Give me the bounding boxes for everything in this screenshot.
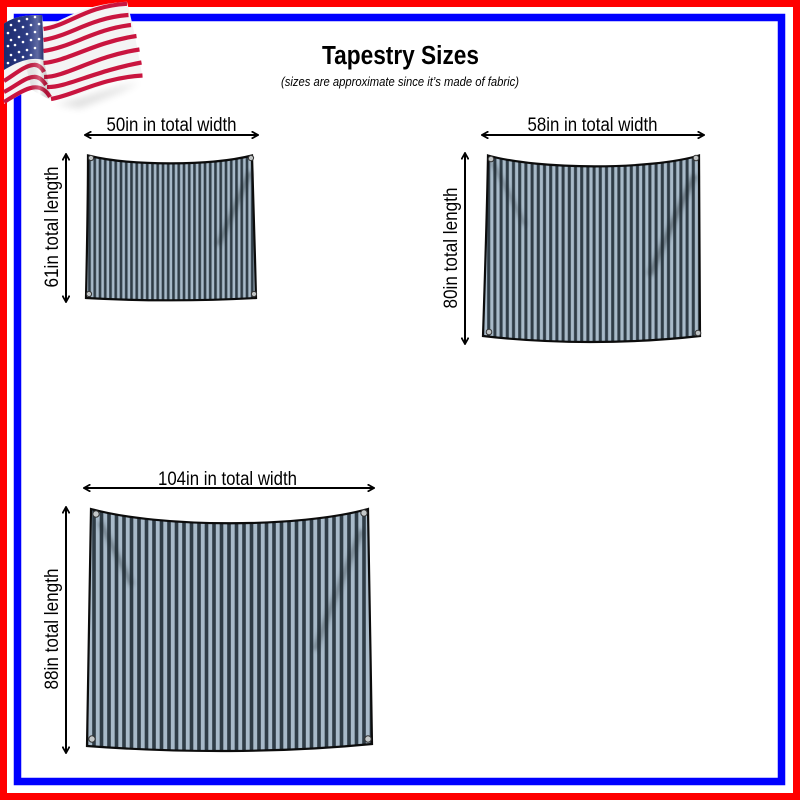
length arrow 88in [65, 507, 67, 753]
width arrow 58in [482, 134, 704, 136]
tapestry: medium striped fabric [483, 155, 701, 342]
length arrow 80in [464, 153, 466, 344]
subtitle note: (sizes are approximate since it’s made of fabric) [281, 75, 519, 89]
width arrow 104in [84, 487, 374, 489]
width label 58in: 58in in total width [528, 115, 658, 136]
panel: small tapestry 50in by 61in [42, 115, 258, 302]
tapestry: small striped fabric [86, 155, 257, 300]
tapestry: large striped fabric [87, 509, 372, 751]
length label 80in: 80in total length [441, 188, 462, 308]
length label 88in: 88in total length [42, 568, 63, 690]
length label 61in: 61in total length [42, 166, 63, 288]
width label 50in: 50in in total width [106, 115, 236, 136]
width label 104in: 104in in total width [158, 469, 297, 490]
flag canton with stars [4, 15, 44, 70]
panel: large tapestry 104in by 88in [42, 469, 374, 753]
flag stripes [4, 4, 142, 102]
title: Tapestry Sizes [322, 42, 479, 70]
width arrow 50in [85, 134, 258, 136]
length arrow 61in [65, 154, 67, 302]
panel: medium tapestry 58in by 80in [441, 115, 704, 344]
icon: waving American flag [4, 2, 143, 108]
